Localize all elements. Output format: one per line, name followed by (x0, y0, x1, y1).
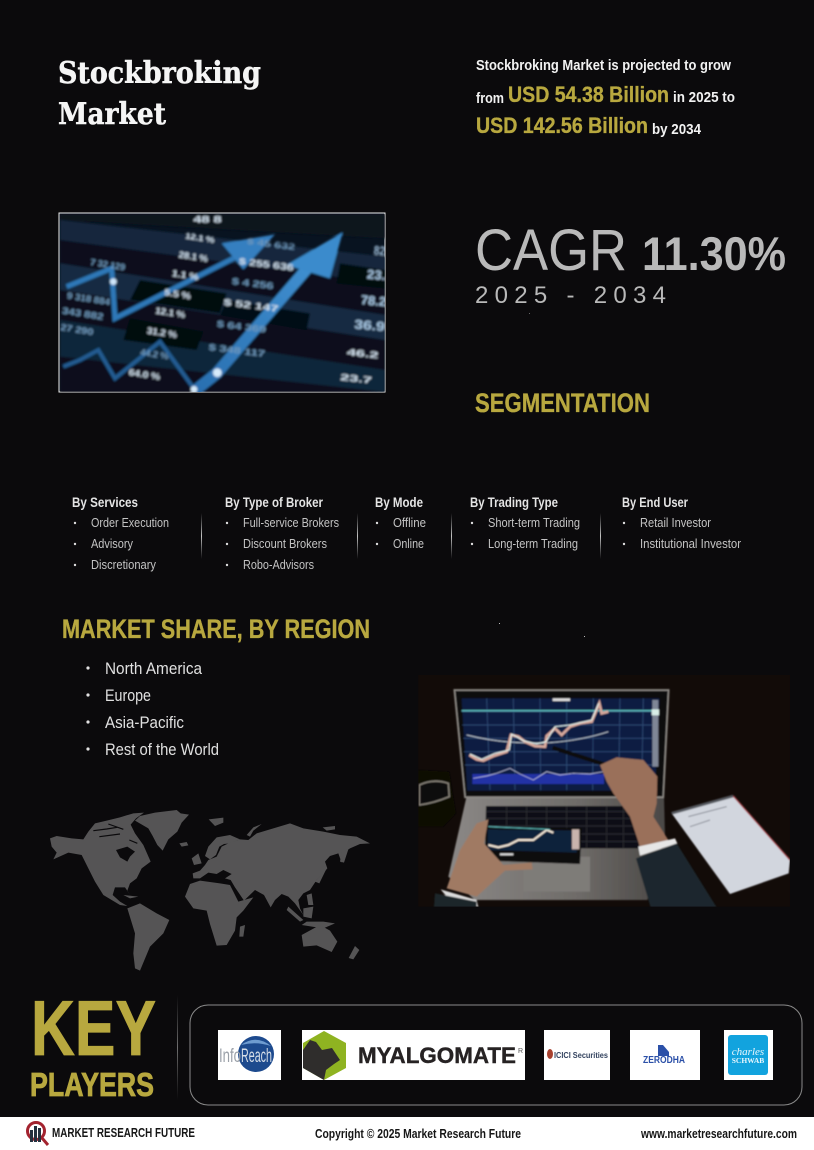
photo: stock data with rising arrows: 5.5 % (164, 287, 192, 301)
market projection text: from (476, 90, 504, 107)
photo: stock data with rising arrows: 27 290 (60, 322, 94, 337)
photo: laptop and phone trading charts (418, 675, 790, 907)
key players heading (30, 984, 156, 1103)
CAGR figure (475, 218, 786, 309)
market projection text: in 2025 to (673, 89, 735, 106)
photo: stock data with rising arrows: $ 255 636 (238, 256, 294, 273)
photo: stock data with rising arrows: $ 4 256 (231, 276, 274, 291)
logo: InfoReach (218, 1030, 281, 1080)
segmentation heading: SEGMENTATION (475, 388, 650, 418)
photo: stock data with rising arrows: $ 52 147 (223, 297, 279, 314)
logo: ICICI Securities (544, 1030, 610, 1080)
column: by services: Advisory (91, 537, 134, 551)
arctic islands (209, 818, 223, 826)
column: by trading type (470, 495, 580, 551)
photo: stock data with rising arrows: 78.2 (360, 293, 387, 309)
footer (0, 1117, 814, 1150)
title: Market (58, 97, 166, 132)
africa (185, 881, 253, 946)
photo: stock data with rising arrows: 82 (373, 243, 386, 258)
south america (127, 903, 169, 971)
footer: Copyright © 2025 Market Research Future (315, 1127, 521, 1141)
photo: stock data with rising arrows: 1.1 % (171, 268, 199, 282)
scandinavia (205, 835, 240, 859)
column: by end user (622, 495, 741, 551)
region list: North America (105, 659, 202, 678)
photo: stock data with rising arrows: 31.2 % (146, 325, 178, 340)
key players panel (190, 1005, 802, 1105)
column: by trading type: By Trading Type (470, 495, 558, 510)
column: by type of broker: By Type of Broker (225, 495, 324, 510)
title (58, 56, 261, 132)
logo: ICICI Securities: ICICI Securities (554, 1051, 609, 1060)
title: Stockbroking (58, 56, 261, 91)
photo: stock data with rising arrows: 28.1 % (178, 249, 209, 264)
photo: stock data with rising arrows: 12.1 % (185, 230, 215, 245)
market projection text: USD 54.38 Billion (508, 82, 669, 107)
column: by mode: Online (393, 537, 424, 551)
column: by services: Discretionary (91, 558, 157, 572)
column: by services: By Services (72, 495, 138, 510)
market projection text: USD 142.56 Billion (476, 113, 648, 138)
column: by end user: Retail Investor (640, 516, 711, 530)
region list: Asia-Pacific (105, 713, 184, 732)
footer logo icon (28, 1122, 48, 1145)
market projection text: by 2034 (652, 121, 702, 138)
key players heading: PLAYERS (30, 1066, 154, 1103)
column: by end user: By End User (622, 495, 689, 510)
greenland (135, 810, 189, 851)
logo: Zerodha: ZERODHA (643, 1055, 685, 1066)
british isles (192, 853, 202, 865)
column: by mode: By Mode (375, 495, 423, 510)
world map (50, 810, 370, 971)
photo: stock data with rising arrows: 64.0 % (128, 367, 161, 382)
photo: stock data with rising arrows: 7 32 129 (90, 257, 126, 272)
photo: stock data with rising arrows: $ 348 117 (208, 342, 266, 359)
japan (315, 863, 327, 883)
logo: InfoReach: Reach (241, 1046, 272, 1067)
market projection text (476, 57, 735, 138)
column: by services: Order Execution (91, 516, 169, 530)
segmentation columns (72, 495, 741, 572)
photo: stock data with rising arrows: 46.2 (346, 347, 379, 360)
iceland (179, 842, 188, 847)
photo: stock data with rising arrows: 23. (366, 267, 386, 283)
CAGR figure: 11.30% (642, 227, 786, 280)
australia (302, 925, 337, 952)
column: by mode (375, 495, 426, 551)
logo: MyAlgomate: MYALGOMATE (358, 1043, 516, 1068)
sakhalin (340, 849, 348, 863)
photo: stock data with rising arrows: 343 882 (61, 305, 104, 322)
region list (86, 659, 219, 759)
column: by type of broker (225, 495, 339, 572)
photo: stock data with rising arrows (59, 213, 387, 393)
stray specks (499, 313, 585, 637)
CAGR figure: 2025 - 2034 (475, 282, 666, 309)
region list: Rest of the World (105, 740, 219, 759)
logo: Charles Schwab (724, 1030, 773, 1080)
photo: stock data with rising arrows: 9 318 884 (66, 290, 111, 307)
column: by type of broker: Discount Brokers (243, 537, 327, 551)
photo: stock data with rising arrows: 36.9 (354, 317, 386, 334)
hudson bay (116, 847, 135, 862)
new zealand (349, 946, 359, 959)
column: by end user: Institutional Investor (640, 537, 741, 551)
southeast asia islands (287, 907, 303, 922)
caribbean (123, 895, 138, 898)
column: by trading type: Short-term Trading (488, 516, 580, 530)
photo: stock data with rising arrows: 44.2 % (140, 347, 169, 361)
logo: Charles Schwab: SCHWAB (732, 1056, 764, 1065)
photo: stock data with rising arrows: 23.7 (340, 372, 372, 385)
column: by type of broker: Full-service Brokers (243, 516, 339, 530)
column: by services (72, 495, 169, 572)
logo: Charles Schwab: charles (732, 1046, 764, 1058)
column: by mode: Offline (393, 516, 426, 530)
footer: MARKET RESEARCH FUTURE (52, 1126, 195, 1140)
logo: Zerodha (630, 1030, 700, 1080)
market projection text: Stockbroking Market is projected to grow (476, 57, 731, 74)
eurasia (193, 823, 370, 915)
CAGR figure: CAGR (475, 218, 627, 283)
column: by trading type: Long-term Trading (488, 537, 578, 551)
arctic channels (93, 824, 137, 843)
key players heading: KEY (31, 984, 156, 1072)
region list: Europe (105, 686, 151, 705)
logo: InfoReach: Info (219, 1046, 241, 1067)
north america (50, 813, 151, 906)
column: by type of broker: Robo-Advisors (243, 558, 314, 572)
logo: MyAlgomate (302, 1030, 525, 1080)
madagascar (239, 925, 245, 937)
logo: MyAlgomate: R (518, 1048, 523, 1055)
photo: stock data with rising arrows: $ 45 632 (246, 236, 296, 252)
photo: stock data with rising arrows: $ 64 369 (216, 319, 267, 335)
photo: stock data with rising arrows: 12.1 % (155, 305, 186, 320)
photo: stock data with rising arrows: 48 8 (193, 215, 222, 225)
market share heading: MARKET SHARE, BY REGION (62, 614, 370, 644)
